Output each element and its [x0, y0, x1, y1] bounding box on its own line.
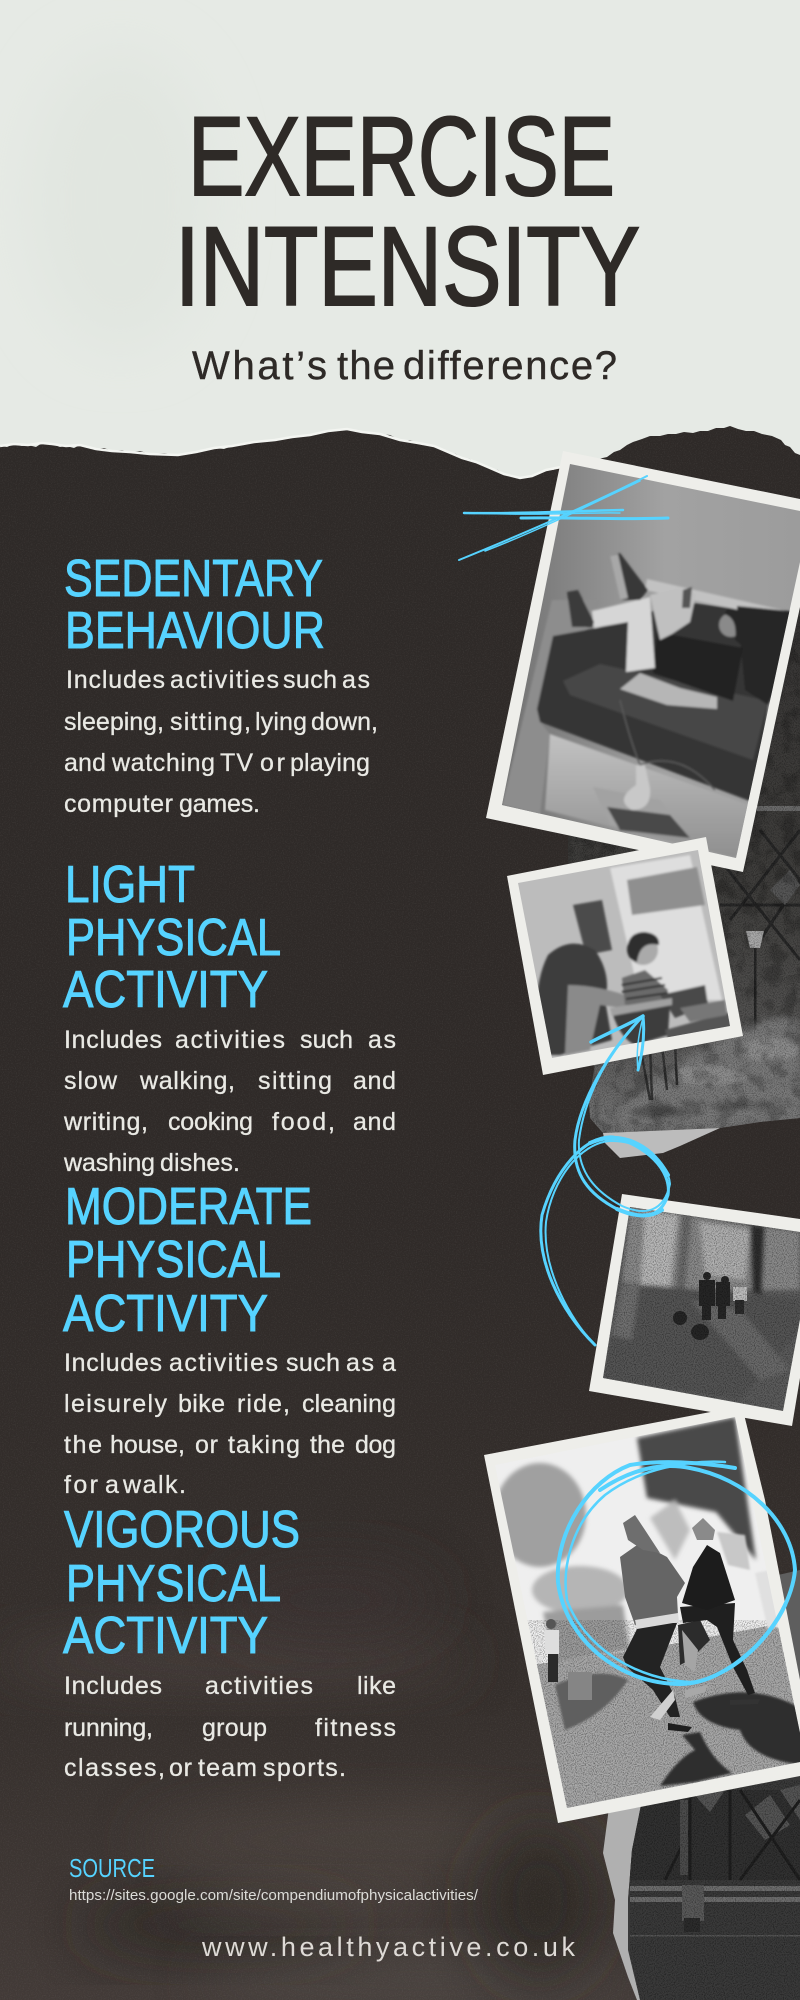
title: INTENSITY — [175, 204, 640, 329]
text: moderate description: ride, — [237, 1390, 290, 1418]
heading: vigorous physical activity — [63, 1501, 300, 1665]
text: sedentary description: sitting, — [170, 708, 251, 736]
website footer: www.healthyactive.co.uk — [201, 1932, 576, 1962]
text: sedentary description: or — [260, 749, 285, 777]
text: sedentary description: and — [64, 749, 106, 777]
text: moderate description: taking — [228, 1431, 300, 1459]
runner left — [620, 1515, 692, 1732]
source heading: SOURCE — [69, 1853, 155, 1883]
text: light description — [63, 1026, 396, 1177]
subtitle: the — [337, 344, 395, 388]
text: light description: such — [300, 1026, 353, 1054]
text: moderate description: the — [64, 1431, 102, 1459]
text: sedentary description: Includes — [66, 666, 165, 694]
section: light physical activity — [63, 856, 396, 1177]
heading: light physical activity: LIGHT — [65, 856, 195, 914]
heading: moderate physical activity — [63, 1178, 312, 1343]
heading: moderate physical activity: MODERATE — [65, 1178, 312, 1236]
heading: vigorous physical activity: VIGOROUS — [64, 1501, 300, 1559]
text: moderate description: or — [195, 1431, 218, 1459]
scribble: circle around runners — [558, 1462, 795, 1684]
background photo: torn lattice and lamp scene, right side — [560, 600, 800, 1158]
arrow: looping arrow pointing at cooking photo — [541, 1016, 670, 1345]
text: vigorous description: activities — [205, 1672, 313, 1700]
text: light description: activities — [175, 1026, 285, 1054]
text: moderate description: walk. — [122, 1471, 186, 1499]
heading: vigorous physical activity: ACTIVITY — [63, 1607, 268, 1665]
text: sedentary description: as — [342, 666, 370, 694]
scribble: crossed lines over sofa photo — [459, 476, 668, 560]
runner right — [678, 1518, 760, 1705]
text: light description: writing, — [63, 1108, 148, 1136]
text: vigorous description: classes, — [64, 1754, 165, 1782]
heading: moderate physical activity: PHYSICAL — [66, 1231, 281, 1289]
text: moderate description: a — [105, 1471, 119, 1499]
text: sedentary description — [64, 666, 378, 818]
text: vigorous description: like — [357, 1672, 396, 1700]
text: vigorous description — [64, 1672, 396, 1782]
text: moderate description — [64, 1349, 396, 1499]
title: EXERCISE — [188, 94, 615, 219]
text: sedentary description: watching — [111, 749, 215, 777]
torn paper header — [0, 0, 800, 478]
text: light description: cooking — [168, 1108, 253, 1136]
text: light description: dishes. — [160, 1149, 240, 1177]
text: sedentary description: such — [283, 666, 337, 694]
text: light description: and — [353, 1108, 396, 1136]
heading: sedentary behaviour — [64, 550, 325, 660]
text: sedentary description: activities — [170, 666, 279, 694]
subtitle: difference? — [403, 344, 617, 388]
text: moderate description: such — [286, 1349, 340, 1377]
photo: walking dogs in a park — [589, 1194, 800, 1426]
heading: light physical activity: ACTIVITY — [63, 961, 268, 1019]
text: moderate description: the — [310, 1431, 345, 1459]
source url: https://sites.google.com/site/compendiumofphysicalactivities/ — [69, 1887, 479, 1904]
text: vigorous description: Includes — [64, 1672, 162, 1700]
text: light description: and — [353, 1067, 396, 1095]
text: sedentary description: down, — [311, 708, 378, 736]
text: moderate description: a — [382, 1349, 396, 1377]
text: moderate description: bike — [178, 1390, 225, 1418]
text: sedentary description: computer — [64, 790, 173, 818]
text: vigorous description: fitness — [315, 1714, 396, 1742]
heading: moderate physical activity: ACTIVITY — [63, 1285, 268, 1343]
text: moderate description: for — [64, 1471, 98, 1499]
text: light description: slow — [64, 1067, 118, 1095]
section: vigorous physical activity — [63, 1501, 396, 1782]
text: light description: sitting — [258, 1067, 332, 1095]
text: vigorous description: running, — [64, 1714, 153, 1742]
text: light description: walking, — [139, 1067, 235, 1095]
text: vigorous description: or — [169, 1754, 192, 1782]
text: sedentary description: games. — [179, 790, 260, 818]
text: moderate description: leisurely — [64, 1390, 168, 1418]
text: light description: food, — [272, 1108, 335, 1136]
lamp post — [746, 931, 764, 1026]
heading: sedentary behaviour: BEHAVIOUR — [65, 602, 325, 660]
text: light description: as — [368, 1026, 396, 1054]
text: moderate description: dog — [355, 1431, 396, 1459]
heading: light physical activity — [63, 856, 281, 1019]
text: sedentary description: playing — [290, 749, 370, 777]
text: sedentary description: sleeping, — [64, 708, 164, 736]
photo: group of runners — [484, 1406, 800, 1823]
text: moderate description: activities — [169, 1349, 278, 1377]
text: moderate description: as — [346, 1349, 374, 1377]
text: moderate description: house, — [110, 1431, 185, 1459]
heading: sedentary behaviour: SEDENTARY — [64, 550, 323, 608]
section: moderate physical activity — [63, 1178, 396, 1499]
text: vigorous description: group — [202, 1714, 267, 1742]
text: vigorous description: team — [198, 1754, 257, 1782]
text: sedentary description: lying — [255, 708, 307, 736]
section: sedentary behaviour — [64, 550, 378, 818]
text: moderate description: Includes — [64, 1349, 162, 1377]
photo: person reading on sofa — [486, 451, 800, 872]
heading: vigorous physical activity: PHYSICAL — [66, 1555, 281, 1613]
title — [175, 94, 640, 329]
heading: light physical activity: PHYSICAL — [66, 909, 281, 967]
text: sedentary description: TV — [220, 749, 253, 777]
text: vigorous description: sports. — [263, 1754, 346, 1782]
background photo: torn gate scene, bottom right — [603, 1570, 800, 2000]
text: light description: Includes — [64, 1026, 162, 1054]
photo: children cooking — [507, 837, 743, 1075]
text: light description: washing — [63, 1149, 155, 1177]
text: moderate description: cleaning — [302, 1390, 396, 1418]
subtitle: What’s — [192, 344, 327, 388]
subtitle — [192, 344, 617, 388]
